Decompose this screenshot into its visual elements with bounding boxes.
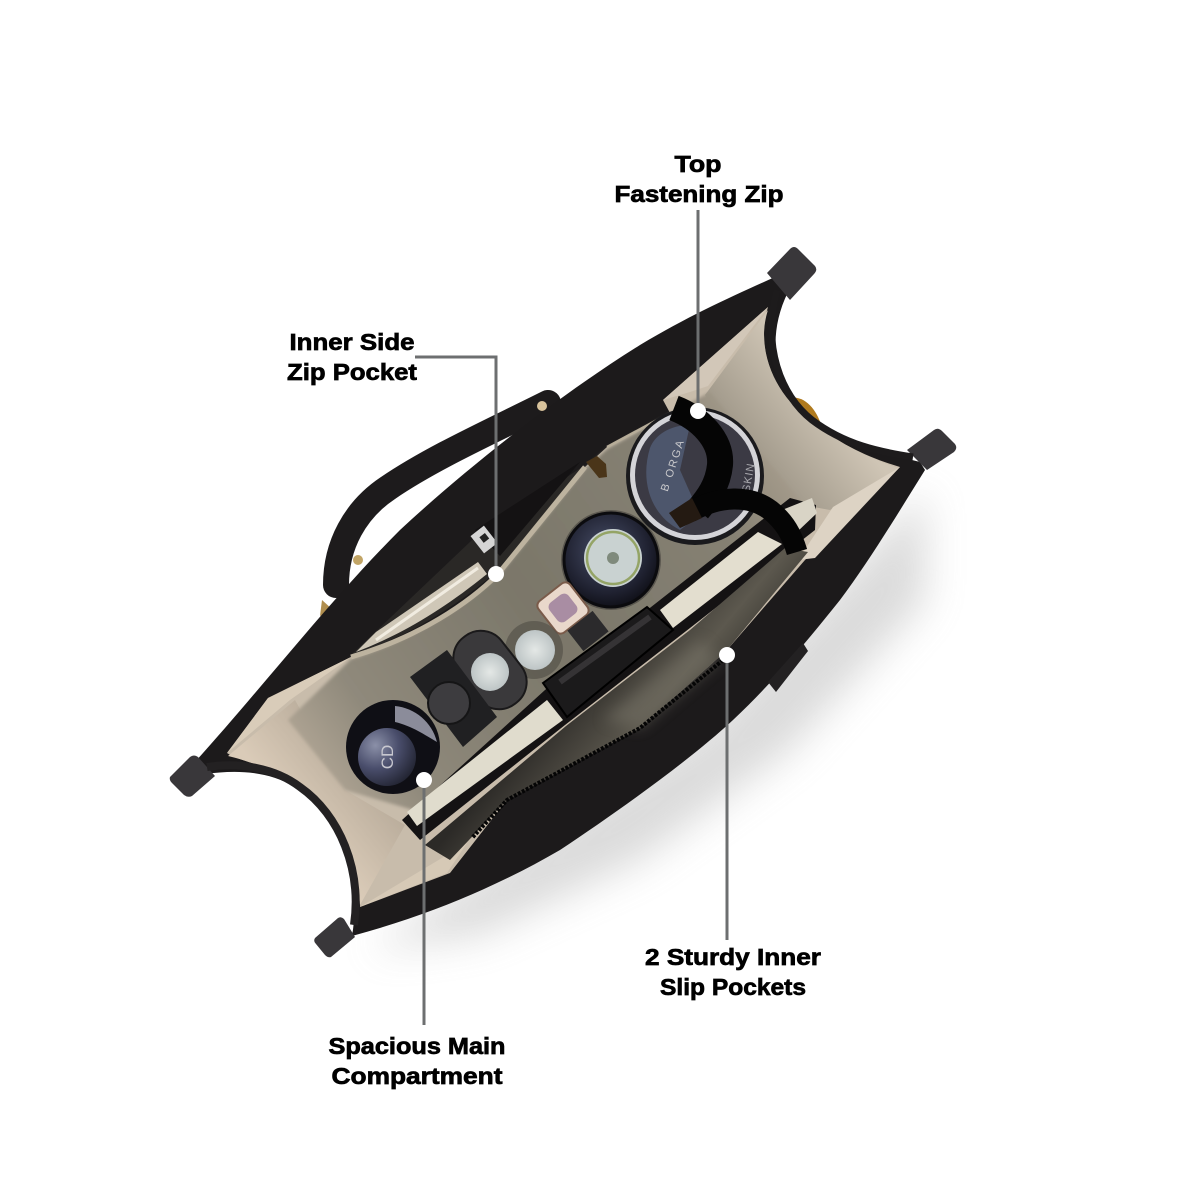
leader: main compartment bbox=[416, 772, 432, 1025]
label: inner side zip pocket: Inner Side bbox=[290, 329, 414, 355]
gold buckle behind bag bbox=[790, 398, 822, 428]
small dark box bbox=[567, 611, 609, 651]
label: sturdy inner slip pockets: 2 Sturdy Inner bbox=[645, 944, 821, 970]
black book cover bbox=[402, 498, 816, 840]
label: spacious main compartment: Compartment bbox=[332, 1063, 503, 1089]
book and pocket bbox=[402, 498, 817, 840]
jar: large printed jar: SKIN bbox=[741, 462, 758, 493]
compact: CD lid: CD bbox=[378, 745, 397, 769]
black square compact bbox=[410, 650, 497, 747]
corner tab: top bbox=[767, 247, 816, 300]
drop shadow bbox=[370, 490, 925, 950]
label: spacious main compartment bbox=[328, 1033, 506, 1089]
gold zip pull bbox=[586, 456, 607, 478]
label: spacious main compartment: Spacious Main bbox=[328, 1033, 506, 1059]
panel: bag body bbox=[170, 247, 956, 957]
label: top fastening zip: Top bbox=[674, 151, 722, 177]
corner tab: bottom bbox=[314, 917, 355, 957]
compact: green ring lid bbox=[561, 510, 661, 610]
interior opening bbox=[227, 307, 900, 907]
corner tab: right bbox=[907, 429, 956, 470]
leader: slip pockets bbox=[719, 647, 735, 940]
label: sturdy inner slip pockets bbox=[645, 944, 821, 1000]
ring: gem case bbox=[535, 580, 591, 636]
icon: gold rivet top bbox=[537, 401, 547, 411]
panel: left lower facing bbox=[360, 843, 467, 907]
zip line back bbox=[607, 413, 670, 447]
leader: top fastening zip bbox=[690, 210, 706, 419]
panel: left upper facing bbox=[227, 657, 351, 753]
pen loop bbox=[543, 607, 673, 717]
book pages: middle bbox=[660, 532, 782, 628]
panel: right lower facing bbox=[798, 467, 900, 560]
book pages: top bbox=[782, 498, 817, 532]
label: top fastening zip bbox=[614, 151, 784, 207]
book pages: low bbox=[407, 700, 563, 826]
leader: inner side zip pocket bbox=[415, 357, 504, 582]
icon: gold handle foot bbox=[320, 600, 333, 616]
compact: CD lid bbox=[346, 700, 440, 794]
jar: cream jar bbox=[505, 621, 563, 679]
back handle bbox=[320, 401, 548, 616]
label: inner side zip pocket bbox=[287, 329, 417, 385]
label: inner side zip pocket: Zip Pocket bbox=[287, 359, 417, 385]
phone in pocket bbox=[356, 562, 487, 652]
pill case with cream bbox=[443, 620, 537, 720]
panel: right upper facing bbox=[663, 307, 768, 400]
panel: bag floor bbox=[288, 392, 800, 812]
strap: zip strap curved bbox=[690, 499, 797, 552]
label: top fastening zip: Fastening Zip bbox=[614, 181, 784, 207]
piping: left bbox=[207, 765, 356, 925]
jar: large printed jar bbox=[626, 407, 764, 545]
zip line front pocket bbox=[472, 660, 723, 838]
corner tab: left bbox=[170, 756, 215, 797]
pocket opening: inner side zip bbox=[351, 413, 670, 657]
zip tape bbox=[351, 467, 585, 657]
gold strap tab bbox=[669, 498, 702, 528]
printed card bbox=[471, 526, 497, 553]
icon: gold handle rivet bbox=[353, 555, 363, 565]
front strap tab bbox=[768, 643, 808, 692]
piping: right bbox=[772, 290, 913, 457]
label: sturdy inner slip pockets: Slip Pockets bbox=[660, 974, 806, 1000]
slip pocket lining bbox=[425, 548, 808, 860]
panel: left side wall bbox=[228, 700, 405, 905]
panel: right side wall bbox=[705, 310, 898, 510]
jar: large printed jar: B ORGA bbox=[659, 437, 687, 493]
strap: zip strap upright bbox=[674, 408, 720, 510]
dark lining bbox=[475, 462, 580, 556]
pocket interior bbox=[351, 465, 585, 655]
